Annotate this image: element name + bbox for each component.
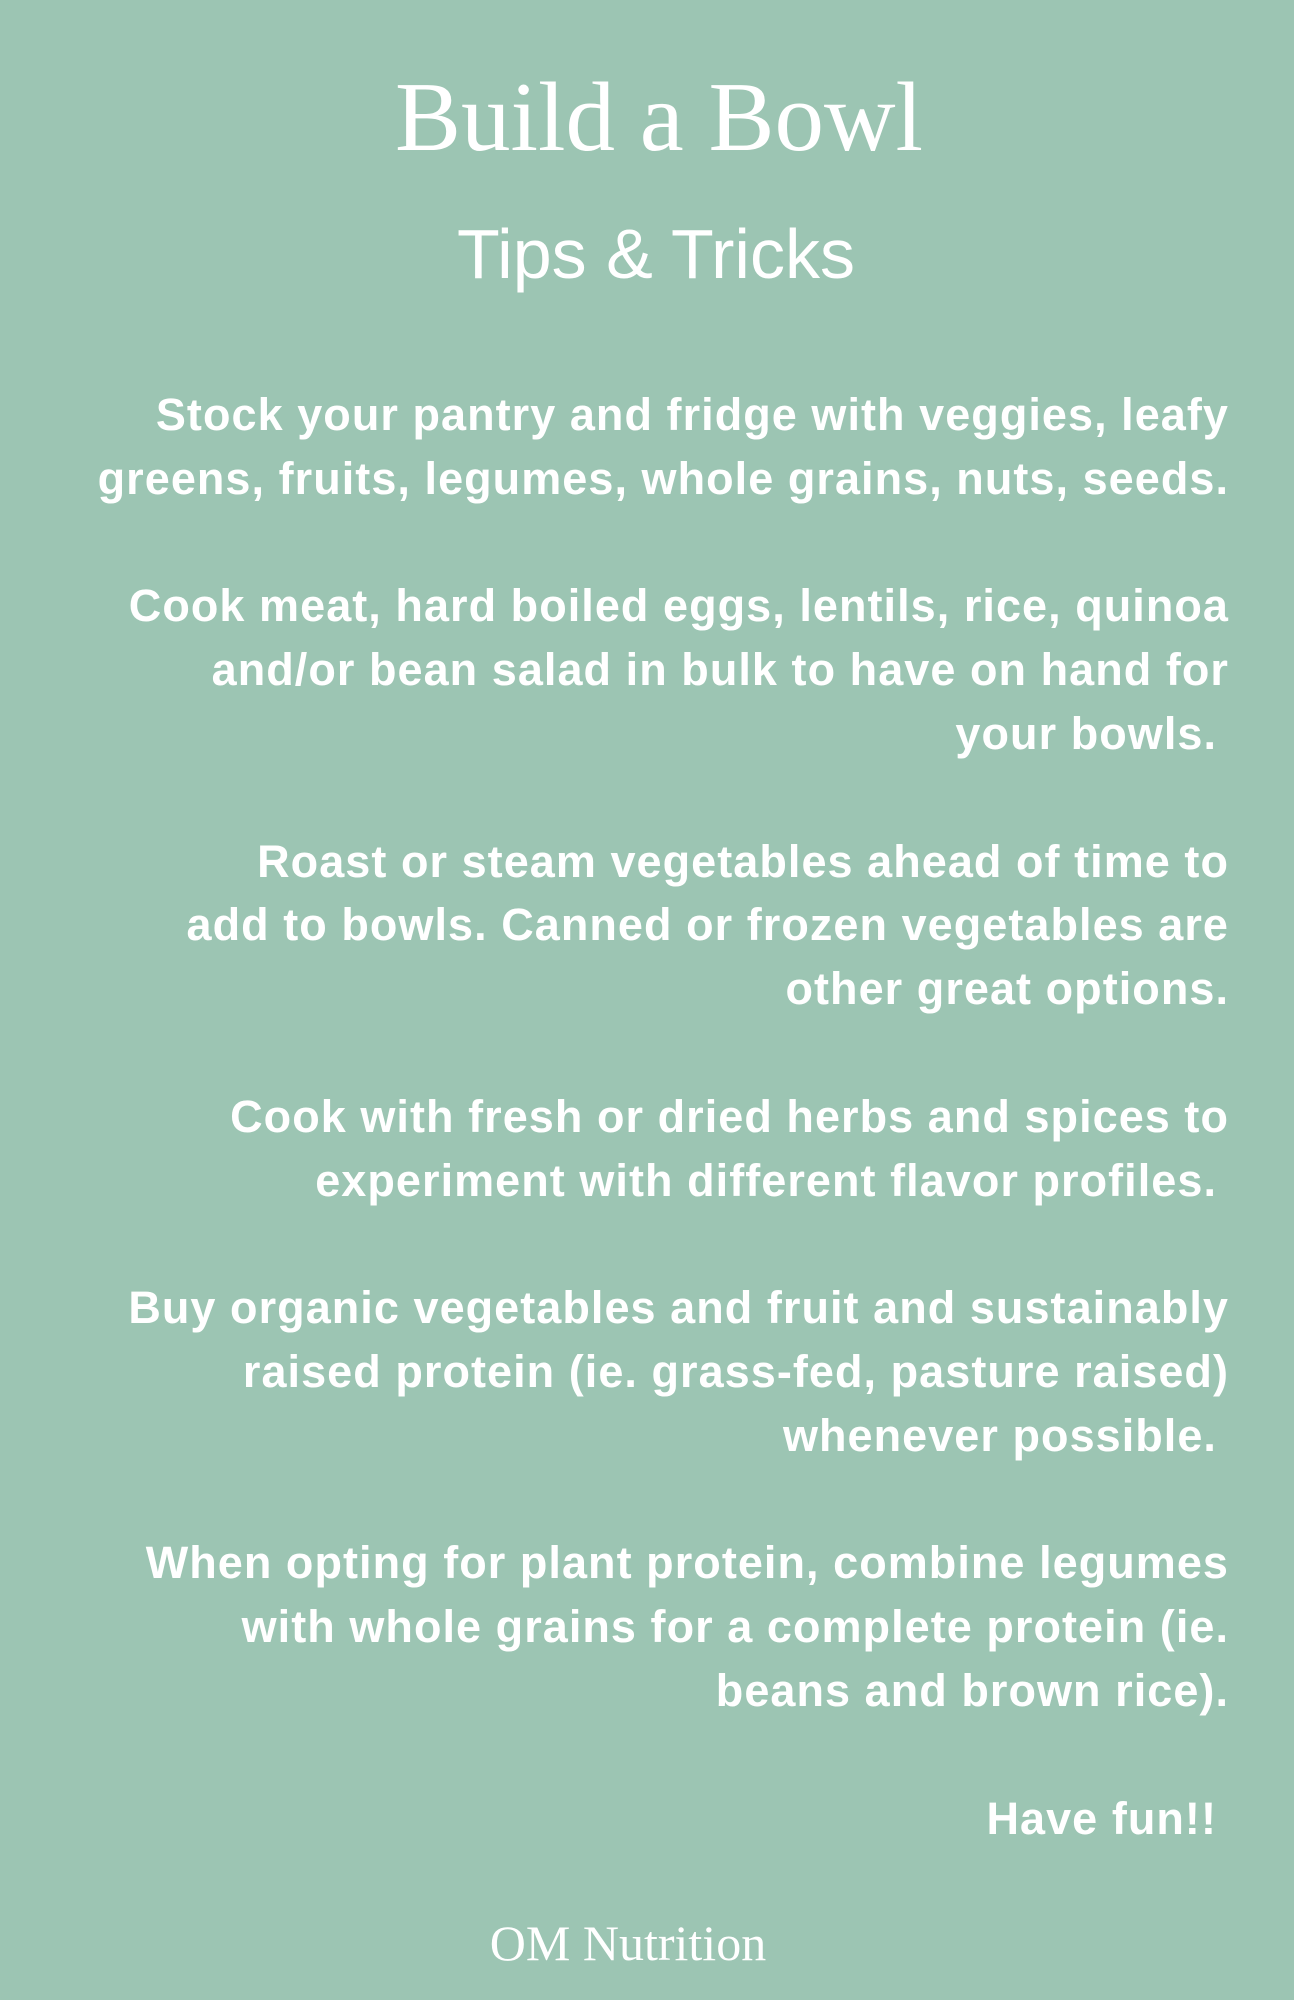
tip: roast vegetables: other great options. (785, 963, 1229, 1014)
tip: roast vegetables (187, 836, 1229, 1014)
footer brand: OM Nutrition (490, 1915, 766, 1971)
title: Build a Bowl (395, 63, 923, 172)
tip: plant protein: beans and brown rice). (716, 1665, 1229, 1716)
subtitle: Tips & Tricks (457, 215, 855, 293)
tip: cook in bulk (129, 580, 1229, 759)
tip: plant protein: When opting for plant protein, combine legumes (146, 1537, 1229, 1588)
tip: buy organic (128, 1282, 1229, 1461)
tip: buy organic: raised protein (ie. grass-fed, pasture raised) (243, 1346, 1229, 1397)
tip: herbs and spices: experiment with different flavor profiles. (315, 1155, 1217, 1206)
tip: herbs and spices (230, 1091, 1229, 1206)
tip: herbs and spices: Cook with fresh or dried herbs and spices to (230, 1091, 1229, 1142)
tip: stock pantry: greens, fruits, legumes, whole grains, nuts, seeds. (98, 453, 1229, 504)
tip: stock pantry: Stock your pantry and fridge with veggies, leafy (156, 389, 1229, 440)
tip: cook in bulk: and/or bean salad in bulk to have on hand for (212, 644, 1229, 695)
tip: roast vegetables: Roast or steam vegetables ahead of time to (257, 836, 1229, 887)
tips list (98, 389, 1229, 1844)
tip: cook in bulk: Cook meat, hard boiled eggs, lentils, rice, quinoa (129, 580, 1229, 631)
tip: plant protein: with whole grains for a complete protein (ie. (242, 1601, 1229, 1652)
tip: plant protein (146, 1537, 1229, 1716)
tip: have fun: Have fun!! (986, 1793, 1217, 1844)
tip: stock pantry (98, 389, 1229, 504)
tip: cook in bulk: your bowls. (955, 708, 1217, 759)
tip: roast vegetables: add to bowls. Canned or frozen vegetables are (187, 899, 1229, 950)
tip: buy organic: Buy organic vegetables and fruit and sustainably (128, 1282, 1229, 1333)
tip: buy organic: whenever possible. (783, 1410, 1217, 1461)
